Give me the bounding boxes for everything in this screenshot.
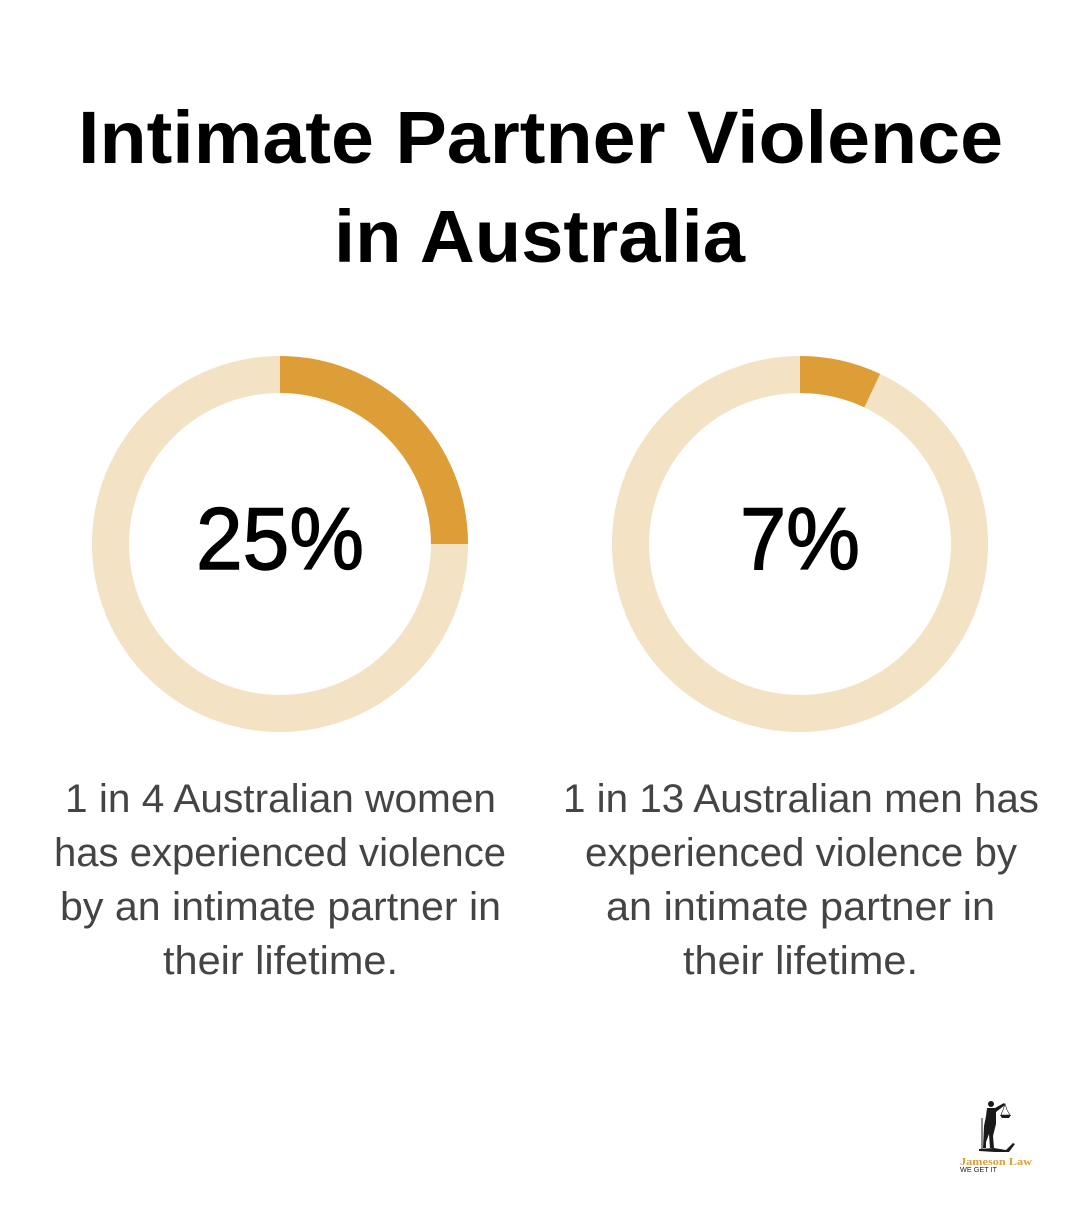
title: in Australia bbox=[334, 195, 746, 278]
title: Intimate Partner Violence bbox=[78, 96, 1003, 179]
description: women: their lifetime. bbox=[163, 939, 398, 983]
title bbox=[78, 96, 1003, 278]
donut chart: 7% bbox=[630, 374, 970, 714]
value: 25%: 25% bbox=[196, 489, 364, 588]
description: men: an intimate partner in bbox=[606, 885, 995, 929]
panel: men statistic bbox=[563, 374, 1039, 983]
description: women: has experienced violence bbox=[54, 831, 506, 875]
description: men bbox=[563, 777, 1039, 983]
description: men: their lifetime. bbox=[683, 939, 918, 983]
tagline: WE GET IT bbox=[960, 1167, 998, 1174]
panel: women statistic bbox=[54, 374, 506, 983]
donut chart: 25% bbox=[110, 374, 450, 714]
description: women bbox=[54, 777, 506, 983]
value: 7%: 7% bbox=[740, 489, 860, 588]
description: men: experienced violence by bbox=[585, 831, 1017, 875]
icon: lady justice bbox=[979, 1101, 1015, 1152]
description: women: 1 in 4 Australian women bbox=[65, 777, 496, 821]
description: women: by an intimate partner in bbox=[60, 885, 501, 929]
logo: Jameson Law bbox=[960, 1101, 1032, 1174]
description: men: 1 in 13 Australian men has bbox=[563, 777, 1039, 821]
brand name: Jameson Law bbox=[960, 1156, 1032, 1168]
